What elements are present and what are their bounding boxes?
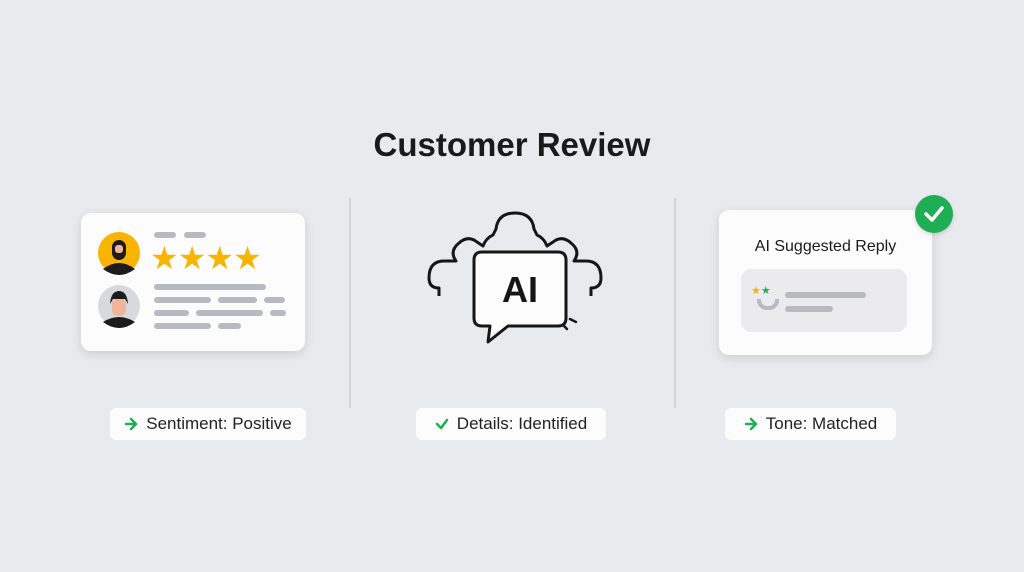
title: Customer Review xyxy=(374,126,650,163)
icon: stars: ★★★★ xyxy=(150,240,261,276)
icon: check badge xyxy=(915,195,953,233)
pill: tone: Tone: Matched xyxy=(766,414,877,433)
pill: sentiment xyxy=(110,408,306,440)
panel: AI suggested reply card xyxy=(719,210,932,355)
reply box: ★★ xyxy=(751,285,771,297)
icon: AI gear speech bubble xyxy=(428,212,602,344)
icon: avatar 1 xyxy=(98,232,140,275)
pill: details: Details: Identified xyxy=(457,414,587,433)
pill: sentiment: Sentiment: Positive xyxy=(146,414,292,433)
panel: review card xyxy=(81,213,305,351)
pill: tone xyxy=(725,408,896,440)
icon: avatar 2 xyxy=(98,285,140,328)
icon: AI gear speech bubble: AI xyxy=(502,269,538,310)
reply box xyxy=(741,269,907,332)
heading: AI Suggested Reply: AI Suggested Reply xyxy=(755,238,896,255)
pill: details xyxy=(416,408,606,440)
